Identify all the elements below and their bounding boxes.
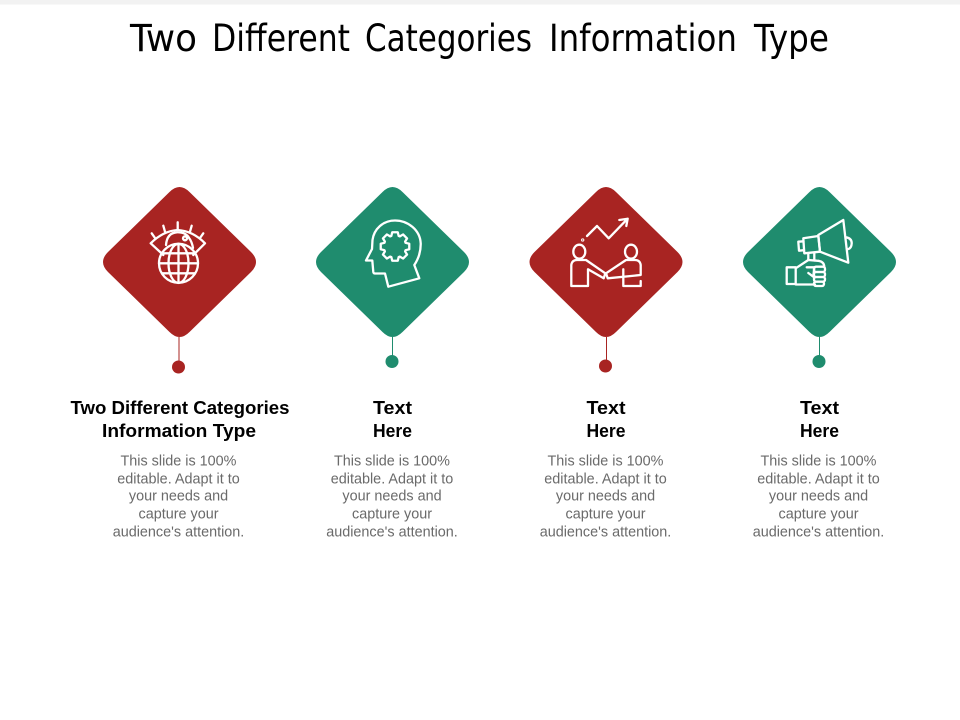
diamond: red: [103, 187, 256, 337]
body text: audience's attention.: [113, 524, 244, 540]
title: Information: [549, 17, 737, 60]
connector line: [178, 337, 180, 362]
dot: [386, 355, 398, 368]
body text: This slide is 100%: [334, 454, 450, 470]
body text: This slide is 100%: [761, 454, 877, 470]
body text: capture your: [138, 506, 219, 522]
body text: your needs and: [769, 488, 868, 504]
body text: editable. Adapt it to: [757, 472, 880, 488]
body text: This slide is 100%: [548, 454, 664, 470]
body text: your needs and: [342, 488, 442, 504]
body text: your needs and: [129, 488, 228, 504]
heading: Text: [373, 397, 412, 418]
panel: text here 1: [316, 187, 469, 540]
heading: Here: [800, 420, 839, 441]
title: Different: [212, 17, 350, 60]
body text: capture your: [566, 506, 646, 522]
heading: Information Type: [102, 420, 256, 441]
dot: [812, 355, 826, 368]
body text: editable. Adapt it to: [331, 472, 453, 488]
body text: audience's attention.: [753, 524, 884, 540]
panel: two different categories: [70, 187, 290, 540]
heading: Here: [373, 420, 412, 441]
diamond: red: [530, 187, 682, 337]
body text: audience's attention.: [540, 524, 671, 540]
icon: head with gear: [366, 220, 421, 287]
title: Type: [753, 17, 829, 60]
heading: Two Different Categories: [70, 397, 290, 418]
heading: Text: [800, 397, 839, 418]
body text: This slide is 100%: [121, 454, 237, 470]
panel: text here 3: [743, 187, 896, 540]
connector line: [818, 337, 820, 356]
body text: editable. Adapt it to: [117, 472, 240, 488]
connector line: [606, 337, 608, 361]
icon: handshake and growth arrow: [571, 219, 641, 286]
body text: editable. Adapt it to: [544, 472, 667, 488]
diamond: green: [316, 187, 469, 337]
dot: [172, 360, 185, 374]
connector line: [392, 337, 394, 356]
diamond: green: [743, 187, 896, 337]
icon: eye and globe: [151, 222, 205, 283]
title: Two: [129, 17, 197, 60]
heading: Here: [586, 420, 626, 441]
body text: your needs and: [556, 488, 655, 504]
body text: capture your: [778, 506, 859, 522]
icon: hand holding megaphone: [787, 220, 852, 286]
heading: Text: [586, 397, 626, 418]
dot: [599, 360, 612, 372]
panel: text here 2: [530, 187, 682, 540]
body text: capture your: [352, 506, 432, 522]
title: Categories: [365, 17, 532, 60]
body text: audience's attention.: [326, 524, 458, 540]
